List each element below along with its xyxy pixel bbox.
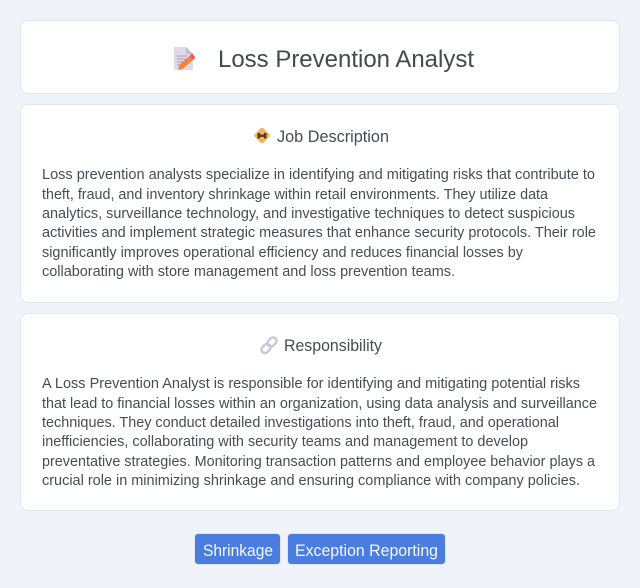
panel: responsibility card [20, 313, 620, 511]
badge: Shrinkage: Shrinkage [203, 542, 273, 560]
text block: responsibility: preventative strategies. Monitoring transaction patterns and employee behavior plays a [42, 454, 596, 470]
heading: responsibility: Responsibility [284, 337, 383, 355]
title: Loss Prevention Analyst [218, 46, 474, 73]
text block: responsibility [42, 376, 597, 489]
panel: title card [20, 20, 620, 94]
text block: responsibility: crucial role in minimizing shrinkage and ensuring compliance with company policies. [42, 473, 580, 489]
text block: responsibility: inefficiencies, collaborating with security teams and management to develop [42, 434, 528, 450]
text block: job description: activities and implement strategic measures that enhance security protocols. Their role [42, 225, 596, 241]
badge: Shrinkage [194, 533, 281, 565]
text block: job description [42, 167, 596, 280]
icon: construction diamond [254, 127, 270, 144]
text block: job description: significantly improves operational efficiency and reduces financial losses by [42, 245, 524, 261]
icon: chain link [260, 336, 278, 355]
heading: job description: Job Description [277, 128, 389, 146]
text block: responsibility: that lead to financial losses within an organization, using data analysis and surveillance [42, 396, 597, 412]
panel: job description card [20, 104, 620, 303]
text block: responsibility: A Loss Prevention Analyst is responsible for identifying and mitigating potential risks [42, 376, 580, 392]
text block: job description: analytics, surveillance technology, and investigative techniques to detect suspicious [42, 206, 575, 222]
badge: Exception Reporting: Exception Reporting [295, 542, 438, 560]
badge: Exception Reporting [287, 533, 446, 565]
text block: responsibility: techniques. They conduct detailed investigations into theft, fraud, and operational [42, 415, 559, 431]
text block: job description: Loss prevention analysts specialize in identifying and mitigating risks that contribute to [42, 167, 595, 183]
text block: job description: theft, fraud, and inventory shrinkage within retail environments. They utilize data [42, 187, 549, 203]
icon: document with pencil [174, 47, 196, 70]
text block: job description: collaborating with store management and loss prevention teams. [42, 264, 455, 280]
